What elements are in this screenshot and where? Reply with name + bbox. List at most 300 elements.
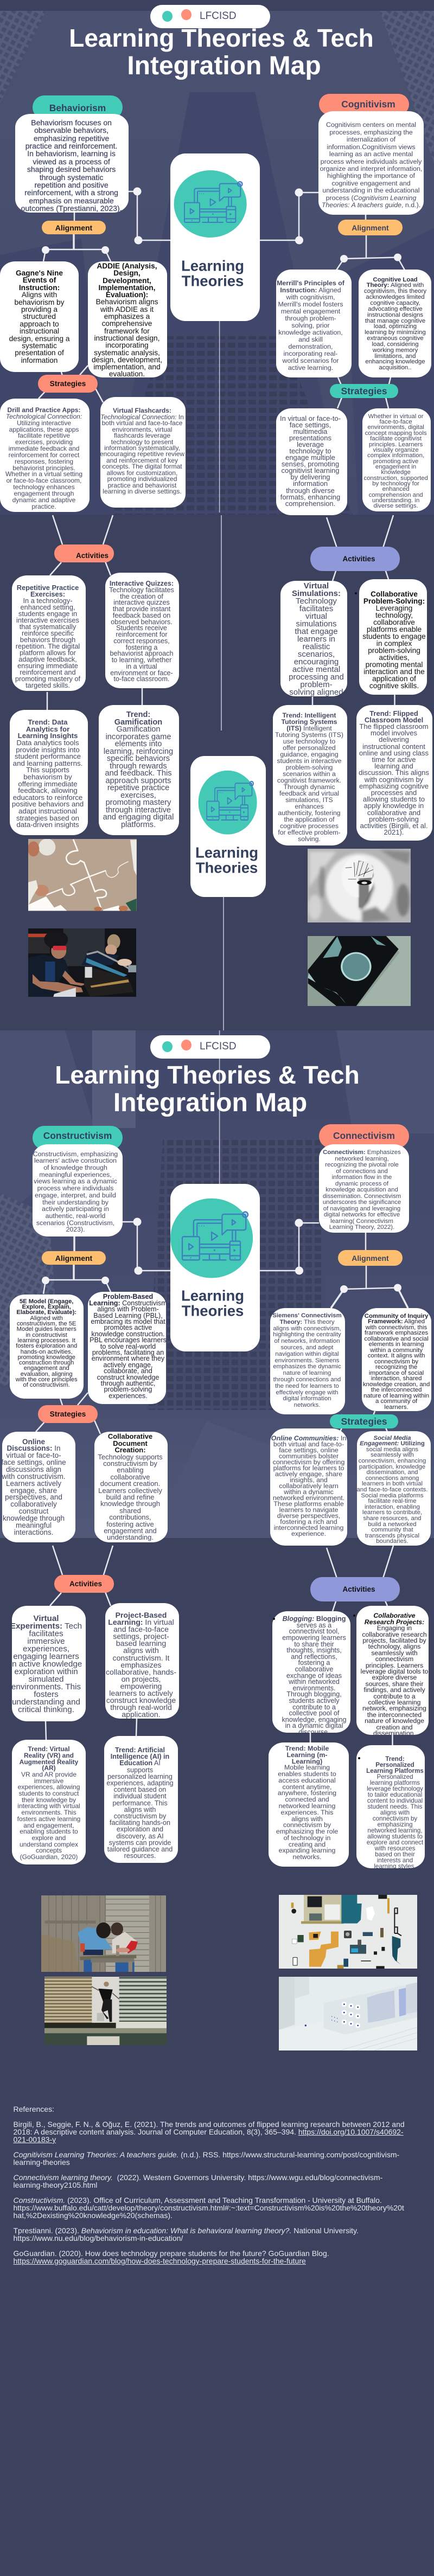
panel: Collaborative Document Creation: fostering active [106, 1520, 154, 1528]
panel: Gagne's Nine Events: Instruction: [19, 284, 60, 292]
panel: Drill and Practice Apps: Utilizing interactive [17, 419, 71, 427]
panel: Trend VR and AR: (GoGuardian, 2020) [20, 1853, 78, 1861]
panel: Blogging: Blogging: Blogging [283, 1615, 346, 1623]
panel: Virtual Simulations: learners in [297, 635, 335, 644]
panel: Collaborative Problem-Solving: activities, [379, 653, 410, 662]
panel: Community of Inquiry Framework: within a community [370, 1347, 423, 1354]
panel: Virtual Experiments: simulated [28, 1675, 64, 1684]
panel: Social Media Engagement: facilitate real-time [368, 1498, 417, 1504]
panel: Cognitive Load Theory: learning by minimizing [365, 329, 426, 336]
panel: Trend Mobile Learning: networks. [292, 1853, 322, 1861]
panel: ADDIE: implementation, and [93, 363, 161, 371]
panel: concept mapping tools: concept mapping tools [365, 430, 427, 437]
panel: Community of Inquiry Framework: framework emphasizes [365, 1330, 428, 1336]
panel: Trend Flipped Classroom: The flipped classroom [359, 722, 429, 730]
panel: multimedia presentations: senses, promoting [282, 460, 339, 468]
panel: Drill and Practice Apps: practice. [31, 503, 56, 510]
label: Learning Theories [181, 1287, 244, 1319]
title top [69, 24, 374, 80]
pill: Strategies constructivism [38, 1405, 98, 1423]
panel: Drill and Practice Apps: reinforcement for correct [9, 451, 79, 459]
panel: Social Media Engagement [357, 1431, 431, 1546]
panel: Siemens' Connectivism Theory: through connections and [273, 1376, 341, 1383]
panel: Trend Artificial Intelligence: personalized learning [107, 1773, 173, 1780]
panel: Drill and Practice Apps: behaviorist principles. [12, 464, 75, 472]
panel: Problem-Based Learning: experiences. [108, 1392, 148, 1400]
panel: multimedia presentations: In virtual or face-to- [280, 414, 341, 422]
panel: Trend Intelligent Tutoring Systems: offer personalized [283, 744, 336, 752]
panel: Virtual Flashcards: promoting individualized [107, 475, 177, 483]
panel: Online Discussions: Discussions: In [7, 1444, 61, 1452]
panel: Cognitive Load Theory: instructional designs [367, 312, 423, 318]
panel: Online Communities: experience. [291, 1530, 326, 1537]
panel: ADDIE: Evaluation): [106, 291, 148, 299]
panel: ADDIE [88, 261, 167, 377]
panel: Virtual Simulations: Technology [296, 597, 337, 606]
pill: Activities behaviorism [54, 544, 114, 562]
panel: Project-Based Learning [105, 1603, 179, 1719]
panel: Cognitive Load Theory: advocating effective [368, 306, 423, 312]
panel: Siemens' Connectivism Theory: sources, and adept [281, 1344, 333, 1351]
panel: Trend Artificial Intelligence: Intelligence (AI) in [111, 1753, 169, 1760]
panel: Trend Intelligent Tutoring Systems: Through dynamic [283, 783, 335, 791]
panel: Blogging: collective pool of [289, 1709, 340, 1717]
panel: Connectivism description: learning( Connectivism [330, 1218, 393, 1225]
panel: Collaborative Problem-Solving: application of [372, 675, 416, 682]
bullet mark [353, 1614, 355, 1617]
panel: Trend Mobile Learning: access educational [278, 1777, 336, 1784]
title lower: Integration Map [113, 1088, 307, 1117]
panel: Collaborative Research Projects: collaborative research [362, 1631, 427, 1638]
panel: Collaborative Research Projects: nature of knowledge [365, 1717, 424, 1725]
panel: Repetitive Practice Exercises: behaviors through [20, 636, 75, 644]
panel: Repetitive Practice Exercises: In a technology- [23, 597, 73, 605]
panel: Connectivism description: knowledge acquisition and [326, 1187, 398, 1193]
icon: teal dot [162, 11, 173, 22]
panel: Repetitive Practice Exercises [12, 575, 86, 691]
panel: 5E Model: Aligned with [30, 1315, 63, 1322]
panel: 5E Model: of constructivism. [23, 1382, 70, 1388]
panel: Trend Gamification: Trend: [126, 710, 150, 719]
panel: Gagne's Nine Events: structured [23, 312, 56, 321]
panel: Virtual Simulations: Simulations: [292, 589, 341, 598]
panel: Problem-Based Learning: Problem-Based [103, 1293, 153, 1300]
panel: Siemens' Connectivism Theory: emphasizes the dynamic [273, 1363, 341, 1370]
panel: Collaborative Research Projects: Research Projects: [365, 1618, 424, 1626]
panel: Siemens' Connectivism Theory: navigation within digital [275, 1351, 339, 1357]
panel: Trend Flipped Classroom: Trend: Flipped [369, 709, 418, 717]
panel: Online Communities: actively engage, share [275, 1470, 342, 1478]
panel: Connectivism description: of navigating and leveraging [323, 1206, 400, 1212]
panel: Online Communities: face settings, online [279, 1446, 339, 1454]
panel: Virtual Flashcards: Technological Connection: In [100, 413, 184, 421]
panel: Connectivism description: underscores the significance [323, 1199, 401, 1206]
panel: Siemens' Connectivism Theory: highlighting the centrality [273, 1331, 341, 1338]
panel: Trend Mobile Learning: Learning (m- [286, 1751, 328, 1759]
panel: 5E Model: Elaborate, Evaluate): [16, 1309, 76, 1316]
panel: Blogging: serves as a [297, 1622, 331, 1629]
panel: Online Discussions: construct [19, 1507, 48, 1515]
references: Cognitivism Learning Theories: A teachers guide. (n.d.). RSS. https://www.structural-learning.com/post/cognitivism- [13, 2150, 399, 2159]
panel: concept mapping tools: complex information, [367, 452, 424, 459]
panel: Collaborative Document Creation: Technology supports [98, 1453, 163, 1461]
panel: Collaborative Research Projects: Collaborative [373, 1612, 416, 1619]
panel: Trend Data Analytics: Trend: Data [28, 718, 68, 726]
panel: Collaborative Document Creation: constructivism by [103, 1459, 157, 1468]
panel: ADDIE: Implementation, [99, 284, 155, 292]
panel: Gagne's Nine Events: instructional [20, 327, 59, 335]
panel: Blogging: Through blogging, [286, 1690, 342, 1698]
panel: 5E Model: Explore, Explain, [22, 1304, 71, 1310]
panel: Online Discussions: knowledge through [3, 1514, 65, 1522]
panel: Social Media Engagement: share resources, and [363, 1515, 422, 1522]
panel: Virtual Experiments: facilitates [29, 1629, 63, 1638]
panel: Connectivism description: digital networks for effective [324, 1212, 400, 1218]
panel: Trend Data Analytics: Learning Insights [18, 732, 78, 740]
panel: Collaborative Document Creation: contributions, [109, 1513, 151, 1521]
panel: Behaviorism description: emphasizing repetitive [34, 134, 109, 143]
panel: Connectivism description: of connections and [336, 1168, 388, 1175]
panel: Project-Based Learning: constructivism. It [113, 1654, 169, 1662]
panel: Social Media Engagement: connections among [366, 1475, 419, 1482]
panel: Social Media Engagement: dissemination, and [367, 1469, 418, 1476]
panel: Interactive Quizzes: Students receive [116, 624, 167, 632]
panel: Trend Personalized Learning Platforms: Personalized [376, 1773, 413, 1780]
panel: Virtual Flashcards: information systematically, [104, 444, 180, 452]
panel: Trend Artificial Intelligence: supports [127, 1766, 153, 1773]
pill: Alignment behaviorism: Alignment [55, 223, 92, 232]
panel: Gagne's Nine Events [0, 261, 79, 372]
panel: ADDIE: comprehensive [102, 319, 152, 328]
panel: Repetitive Practice Exercises: Exercises: [30, 590, 65, 598]
panel: Trend Personalized Learning Platforms: content to individual [367, 1797, 423, 1804]
panel: Online Discussions: meaningful [16, 1521, 52, 1529]
title lower: Learning Theories & Tech [55, 1061, 360, 1089]
panel: Trend Intelligent Tutoring Systems: the application of [284, 816, 334, 823]
photo: person jumping between buildings [44, 1977, 167, 2045]
panel: Merrill's Principles: knowledge activation, [278, 329, 343, 336]
panel: Social Media Engagement: boundaries. [376, 1538, 409, 1545]
panel: Behaviorism description [15, 114, 129, 213]
pill: Strategies connectivism: Strategies [341, 1415, 387, 1426]
panel: ADDIE: with ADDIE as it [100, 305, 154, 313]
panel: Trend VR and AR: interacting with virtual [17, 1802, 80, 1810]
panel: Collaborative Problem-Solving: students to engage [362, 632, 426, 640]
panel: Virtual Experiments: experiences, [23, 1644, 69, 1654]
top header band [0, 0, 434, 11]
panel: Online Discussions: engage, share [10, 1486, 57, 1495]
panel: Siemens' Connectivism Theory: of networks, information [275, 1338, 340, 1344]
panel: Online Communities: Online Communities: In [271, 1434, 346, 1442]
panel: Community of Inquiry Framework: knowledge creation, and [363, 1381, 430, 1388]
panel: Repetitive Practice Exercises: targeted skills. [25, 681, 70, 689]
panel: Constructivism description: their understanding by [42, 1199, 108, 1206]
panel: Connectivism description: networked learning, [335, 1156, 389, 1162]
panel: Community of Inquiry Framework: recognizing the [375, 1364, 417, 1370]
panel: Virtual Simulations: scenarios, [298, 650, 335, 659]
panel: Trend VR and AR: students to construct [19, 1790, 79, 1797]
panel: ADDIE: emphasizes a [104, 312, 150, 321]
panel: Virtual Experiments: fosters [34, 1690, 59, 1699]
panel: Trend Intelligent Tutoring Systems: Trend: Intelligent [282, 712, 336, 719]
panel: Trend Gamification: exercises, [120, 791, 156, 800]
panel: multimedia presentations: multimedia [293, 427, 327, 435]
panel: concept mapping tools: visually organize [373, 447, 419, 453]
panel: ADDIE: framework for [104, 327, 150, 335]
panel: Merrill's Principles: incorporating real- [284, 349, 337, 357]
references: learning-theories [13, 2158, 70, 2167]
bullet mark [358, 1757, 360, 1759]
panel: Behaviorism description: emphasis on measurable [29, 196, 114, 205]
panel: Trend Gamification: and feedback. This [105, 769, 172, 778]
panel: concept mapping tools: engagement in [375, 464, 416, 470]
header pill: LFCISD top [150, 5, 270, 28]
panel: Merrill's Principles: demonstration, [289, 343, 333, 350]
panel: Blogging: to share their [294, 1641, 334, 1648]
panel: Virtual Simulations: facilitates [299, 604, 333, 613]
panel: Trend Mobile Learning: expanding learning [279, 1847, 335, 1854]
panel: Connectivism description: Learning Theory, 2022). [329, 1224, 394, 1231]
panel: Trend Gamification: platforms. [121, 821, 156, 829]
panel: Problem-Based Learning: Based Learning (PBL), [93, 1312, 163, 1319]
panel: Cognitivism description: processes, emphasizing the [329, 129, 413, 136]
pill: Activities cognitivism [310, 547, 400, 571]
panel: Collaborative Document Creation: knowledge through [100, 1500, 160, 1508]
panel: multimedia presentations: through diverse [286, 486, 335, 495]
panel: Trend Gamification: incorporates game [106, 733, 171, 741]
panel: Trend Artificial Intelligence: systems can provide [109, 1839, 171, 1847]
panel: Cognitivism description: information.Cognitivism views [327, 143, 416, 151]
icon: coral dot [181, 9, 192, 20]
panel: Trend Personalized Learning Platforms: learning platforms [370, 1779, 420, 1786]
panel: Constructivism description: 2023). [66, 1226, 85, 1233]
label: Learning Theories: Learning [181, 1287, 244, 1304]
panel: Trend Flipped Classroom [356, 705, 432, 841]
panel: Online Discussions [2, 1432, 75, 1542]
panel: Collaborative Document Creation: Creation: [114, 1446, 146, 1454]
panel: Online Communities: learners to navigate [279, 1506, 338, 1514]
header pill: LFCISD lower [150, 1035, 270, 1059]
panel: Project-Based Learning: settings, project- [113, 1632, 169, 1641]
panel: Trend Gamification: approach supports [106, 777, 171, 785]
label: Learning Theories: Theories [182, 272, 244, 289]
panel: Collaborative Problem-Solving: Problem-Solving: [363, 597, 425, 605]
panel: Social Media Engagement: transcends physical [365, 1533, 419, 1539]
panel: Trend Intelligent Tutoring Systems: enhances [295, 803, 324, 810]
panel: Online Discussions: interactions. [14, 1528, 53, 1536]
panel: Behaviorism description: Behaviorism focuses on [31, 118, 112, 127]
panel: Repetitive Practice Exercises: Repetitive Practice [17, 584, 79, 592]
panel: Repetitive Practice Exercises: reinforce specific [22, 629, 74, 637]
label: Learning Theories: Theories [182, 1302, 244, 1319]
panel: Problem-Based Learning: construct knowledge [97, 1374, 159, 1381]
references: https://www.nu.edu/blog/behaviorism-in-education/ [13, 2234, 183, 2242]
pill: Behaviorism heading [33, 95, 123, 119]
panel: ADDIE: incorporating [105, 341, 149, 349]
panel: multimedia presentations: face settings, [290, 421, 331, 429]
panel: ADDIE: design, development, [92, 356, 162, 364]
panel: Trend Data Analytics: student performance [15, 752, 81, 760]
panel: Cognitivism description: understanding in the educational [322, 187, 420, 194]
panel: Merrill's Principles: Merrill's Principles of [277, 279, 344, 286]
panel: Trend Mobile Learning: networked learning [279, 1802, 335, 1810]
panel: Constructivism description: meaningful experiences, [39, 1171, 112, 1178]
pill: Alignment constructivism: Alignment [55, 1254, 92, 1263]
panel: Siemens' Connectivism Theory [270, 1308, 345, 1414]
panel: Problem-Based Learning: environment where they [92, 1355, 164, 1362]
panel: Online Discussions: collaboratively [10, 1500, 57, 1508]
panel: Collaborative Document Creation: document creation. [100, 1479, 160, 1488]
panel: Connectivism description [319, 1144, 409, 1233]
panel: Constructivism description: authentic, real-world [46, 1212, 105, 1220]
panel: Social Media Engagement: social media aligns [366, 1446, 418, 1453]
icon: teal dot [162, 1041, 173, 1052]
panel: multimedia presentations: presentations [289, 434, 331, 442]
panel: Virtual Simulations: problem- [300, 680, 333, 689]
panel: Cognitivism description: Cognitivism centers on mental [326, 121, 416, 129]
panel: Trend Artificial Intelligence: constructivism by [114, 1812, 166, 1820]
panel: 5E Model: 5E Model (Engage, [20, 1298, 73, 1305]
panel: Virtual Flashcards: concepts. The digital format [102, 463, 182, 470]
panel: Blogging: and reflections, [291, 1653, 337, 1661]
connector: section one tree [39, 188, 405, 710]
panel: Cognitive Load Theory: limitations, and [374, 353, 416, 360]
panel: Problem-Based Learning: promotes active [104, 1324, 152, 1331]
panel: Collaborative Problem-Solving: in complex [376, 639, 412, 648]
panel: Project-Based Learning: application. [122, 1710, 161, 1719]
panel: Interactive Quizzes: observed behaviors. [111, 618, 173, 626]
panel: Trend VR and AR: explore and [32, 1834, 66, 1842]
references: learning-theory2105.html [13, 2181, 97, 2189]
panel: Trend VR and AR: their knowledge by [22, 1796, 76, 1804]
panel: Trend Intelligent Tutoring Systems [273, 705, 347, 845]
panel: Blogging: within networked [289, 1678, 340, 1686]
panel: Trend Mobile Learning: Trend: Mobile [285, 1745, 329, 1752]
panel: Collaborative Document Creation: Collaborative [108, 1432, 152, 1440]
panel: Problem-Based Learning: to solve real-world [100, 1343, 156, 1350]
panel: Blogging: contribute to a [292, 1703, 336, 1710]
panel: Behaviorism description: through systematic [40, 173, 103, 182]
panel: Merrill's Principles: with cognitivism, [286, 293, 335, 300]
panel: Blogging [272, 1611, 350, 1733]
panel: Online Communities [270, 1428, 347, 1546]
panel: concept mapping tools: facilitate cognitivist [370, 435, 422, 442]
connector: central spine [220, 321, 224, 1184]
panel: Trend Data Analytics: data-driven insights [16, 821, 79, 829]
panel: Collaborative Document Creation: collaborative [111, 1473, 150, 1481]
panel: Virtual Flashcards: and reinforcement of key [106, 457, 178, 464]
panel: Blogging: empowering learners [282, 1634, 346, 1642]
panel: Collaborative Research Projects: explore diverse [372, 1674, 417, 1681]
panel: Blogging: in a dynamic digital [285, 1722, 343, 1729]
panel: Problem-Based Learning [88, 1292, 166, 1404]
panel: Trend Data Analytics: positive behaviors and [12, 800, 84, 808]
panel: Constructivism description: actively participating in [42, 1205, 109, 1213]
panel: Trend Mobile Learning: experiences. This [281, 1809, 333, 1816]
panel: Repetitive Practice Exercises: ensuring immediate [17, 662, 78, 670]
panel: Trend Intelligent Tutoring Systems: (ITS) Intelligent [286, 725, 332, 732]
panel: Trend Flipped Classroom: apply knowledge in [364, 802, 424, 810]
panel: Online Discussions: virtual or face-to- [6, 1451, 61, 1459]
panel: 5E Model: construction through [19, 1360, 74, 1366]
panel: Virtual Experiments: Experiments: Tech [12, 1622, 82, 1631]
panel: 5E Model: learning processes. It [18, 1337, 75, 1344]
panel: Trend Flipped Classroom: model involves [371, 729, 417, 737]
label: Learning Theories: Learning [181, 257, 244, 274]
panel: Gagne's Nine Events: design, ensuring a [9, 335, 69, 343]
panel: Trend Flipped Classroom: processes and [371, 789, 417, 797]
panel: Cognitive Load Theory: that manage cognitive [365, 318, 425, 324]
panel: Virtual Simulations: active mental [292, 665, 340, 674]
panel: Blogging: students actively [289, 1697, 340, 1704]
panel: Problem-Based Learning: knowledge construction. [91, 1330, 165, 1338]
panel: Trend Data Analytics: educators to reinforce [13, 793, 82, 802]
panel: Trend Flipped Classroom: online and using class [359, 749, 429, 757]
references: Birgili, B., Seggie, F. N., & Oğuz, E. (2021). The trends and outcomes of flipped learning research between 2012 and [13, 2120, 405, 2129]
panel: 5E Model: engagement and [24, 1365, 69, 1372]
panel: Collaborative Document Creation: enabling [117, 1466, 144, 1474]
pill: Alignment behaviorism [42, 221, 106, 234]
panel: Virtual Simulations: processing and [289, 672, 344, 682]
panel: Community of Inquiry Framework: learners. [384, 1404, 409, 1411]
panel: Collaborative Problem-Solving: problem-solving [368, 646, 420, 654]
panel: Collaborative Document Creation: build and refine [106, 1493, 154, 1501]
panel: Trend VR and AR: environments. This [21, 1809, 76, 1816]
panel: Social Media Engagement: participation, knowledge [359, 1464, 425, 1470]
panel: Project-Based Learning: on projects, [122, 1675, 161, 1683]
panel: Trend Personalized Learning Platforms: aligns with [380, 1809, 410, 1816]
pill: Strategies cognitivism [330, 384, 398, 398]
panel: central card Learning Theories top [170, 153, 260, 321]
title top: Integration Map [127, 52, 321, 80]
panel: multimedia presentations [276, 408, 347, 515]
panel: Project-Based Learning: and face-to-face [113, 1625, 169, 1633]
panel: Interactive Quizzes: behaviorist approach [110, 650, 173, 657]
panel: Online Discussions: discussions align [6, 1465, 61, 1473]
panel: Online Discussions: with constructivism. [2, 1472, 66, 1481]
panel: Virtual Flashcards: practice and behaviorist [108, 482, 176, 489]
panel: Virtual Simulations: encouraging [294, 657, 339, 667]
connector: section two tree [36, 1218, 408, 1745]
panel: Gagne's Nine Events: Events of [23, 276, 56, 284]
panel: 5E Model: Model guides learners [17, 1326, 76, 1332]
panel: Blogging: connectivist tool, [289, 1627, 340, 1635]
panel: Behaviorism description: observable behaviors, [34, 126, 108, 134]
panel: Drill and Practice Apps [0, 399, 90, 512]
panel: Trend Artificial Intelligence: discovery, as AI [116, 1832, 164, 1840]
panel: Trend Artificial Intelligence: experiences, adapting [106, 1779, 174, 1787]
panel: Drill and Practice Apps: facilitate repetitive [18, 432, 70, 439]
panel: Social Media Engagement: seamlessly with [371, 1452, 414, 1458]
panel: Drill and Practice Apps: Technological Connection: [6, 413, 82, 420]
panel: Collaborative Research Projects: leverage digital tools to [361, 1668, 428, 1675]
panel: Siemens' Connectivism Theory: environments. Siemens [275, 1357, 340, 1364]
panel: Collaborative Document Creation: Learners collectively [98, 1486, 162, 1495]
panel: Collaborative Problem-Solving [359, 579, 427, 695]
panel: Merrill's Principles: solving, prior [291, 321, 330, 329]
pill: Activities connectivism: Activities [342, 1585, 375, 1593]
panel: central card Learning Theories middle [190, 756, 266, 897]
panel: Interactive Quizzes: correct responses, [113, 637, 170, 645]
label: Learning Theories [195, 844, 258, 876]
panel: Trend Personalized Learning Platforms: networked learning, [367, 1827, 423, 1834]
panel: Trend Artificial Intelligence: Trend: Artificial [115, 1746, 165, 1754]
references [13, 2105, 405, 2265]
panel: Trend Flipped Classroom: instructional content [362, 742, 425, 751]
panel: Community of Inquiry Framework: Framework: Aligned [368, 1318, 425, 1325]
panel: Trend Flipped Classroom: activities (Birgili, et al. [360, 822, 427, 830]
panel: Project-Based Learning: construct knowledge [106, 1696, 176, 1704]
